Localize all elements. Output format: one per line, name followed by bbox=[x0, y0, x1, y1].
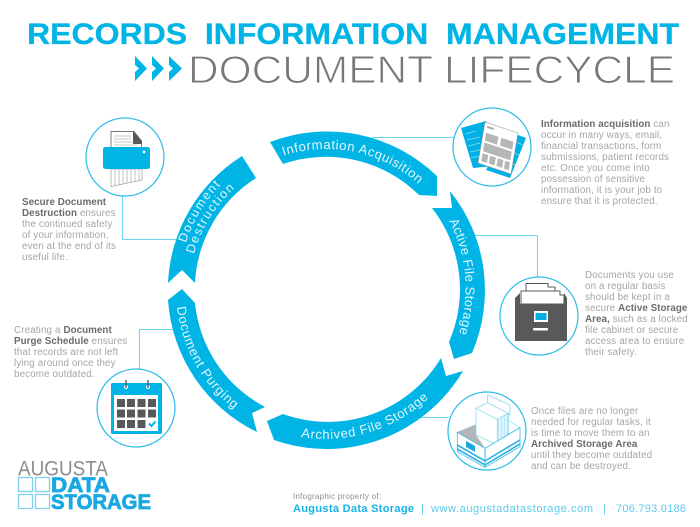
text: document purge schedule: become outdated. bbox=[14, 369, 95, 380]
text: active file storage: Area, such as a locked bbox=[585, 314, 688, 325]
segment: information acquisition bbox=[270, 132, 437, 196]
text: archived file storage bbox=[531, 406, 652, 472]
icon: file cabinet bbox=[500, 277, 578, 355]
text: archived file storage: needed for regular tasks, it bbox=[531, 417, 651, 428]
text: information acquisition: Information acquisition can bbox=[541, 119, 670, 130]
text: archived file storage: until they become outdated bbox=[531, 450, 652, 461]
icon: documents bbox=[453, 108, 531, 186]
icon: calendar bbox=[97, 369, 175, 447]
text: information acquisition: occur in many ways, email, bbox=[541, 130, 662, 141]
text: secure document destruction: Destruction ensures bbox=[22, 208, 116, 219]
text: information acquisition: information, it is your job to bbox=[541, 185, 663, 196]
text: information acquisition: submissions, patient records bbox=[541, 152, 669, 163]
text: active file storage: access area to ensure bbox=[585, 336, 685, 347]
text: information acquisition: ensure that it is protected. bbox=[541, 196, 658, 207]
subtitle: DOCUMENT LIFECYCLE bbox=[188, 49, 675, 92]
text: active file storage: on a regular basis bbox=[585, 281, 665, 292]
text: information acquisition: financial transactions, form bbox=[541, 141, 661, 152]
segment: active file storage: Active File Storage bbox=[449, 220, 475, 334]
text: document purge schedule: lying around once they bbox=[14, 358, 116, 369]
logo: Augusta Data Storage: AUGUSTA bbox=[18, 458, 108, 480]
text: secure document destruction: the continued safety bbox=[22, 219, 112, 230]
segment: archived file storage: Archived File Storage bbox=[300, 394, 428, 439]
text: active file storage: file cabinet or secure bbox=[585, 325, 679, 336]
segment: document destruction: Destruction bbox=[186, 184, 234, 253]
text: active file storage: their safety. bbox=[585, 347, 637, 358]
segment: document purging bbox=[168, 289, 265, 432]
icon: archive box bbox=[448, 392, 526, 470]
text: archived file storage: Archived Storage Area bbox=[531, 439, 638, 450]
text: secure document destruction: of your information, bbox=[22, 230, 109, 241]
footer credit: | bbox=[421, 503, 424, 515]
text: archived file storage: and can be destroyed. bbox=[531, 461, 631, 472]
footer credit: Augusta Data Storage bbox=[293, 503, 414, 515]
text: active file storage: Documents you use bbox=[585, 270, 674, 281]
footer credit bbox=[293, 492, 686, 515]
logo: Augusta Data Storage bbox=[18, 458, 151, 514]
segment: document destruction bbox=[168, 156, 256, 283]
text: document purge schedule: that records are not left bbox=[14, 347, 118, 358]
logo: Augusta Data Storage: STORAGE bbox=[51, 491, 151, 514]
text: active file storage: secure Active Storage bbox=[585, 303, 688, 314]
text: active file storage bbox=[585, 270, 688, 358]
footer credit: Infographic property of: bbox=[293, 492, 381, 501]
text: information acquisition: etc. Once you come into bbox=[541, 163, 650, 174]
icon: shredder bbox=[86, 118, 164, 196]
segment: archived file storage bbox=[267, 358, 463, 449]
text: secure document destruction bbox=[22, 197, 116, 263]
text: information acquisition: possession of sensitive bbox=[541, 174, 645, 185]
text: document purge schedule bbox=[14, 325, 127, 380]
text: information acquisition bbox=[541, 119, 670, 207]
text: active file storage: should be kept in a bbox=[585, 292, 670, 303]
footer credit: 706.793.0186 bbox=[616, 503, 686, 515]
lifecycle ring bbox=[168, 132, 485, 449]
text: secure document destruction: Secure Document bbox=[22, 197, 107, 208]
text: secure document destruction: even at the end of its bbox=[22, 241, 116, 252]
logo: Augusta Data Storage: DATA bbox=[51, 474, 110, 497]
segment: information acquisition: Information Acquisition bbox=[282, 140, 422, 184]
footer credit: | bbox=[603, 503, 606, 515]
title: RECORDS INFORMATION MANAGEMENT bbox=[27, 18, 679, 51]
segment: document destruction: Document bbox=[178, 180, 220, 242]
text: archived file storage: Once files are no longer bbox=[531, 406, 639, 417]
text: document purge schedule: Creating a Document bbox=[14, 325, 112, 336]
text: secure document destruction: useful life. bbox=[22, 252, 68, 263]
footer credit: www.augustadatastorage.com bbox=[430, 503, 593, 515]
segment: active file storage bbox=[432, 191, 485, 359]
text: archived file storage: is time to move them to an bbox=[531, 428, 650, 439]
icon: triple chevrons bbox=[135, 56, 182, 81]
connector lines bbox=[122, 138, 538, 418]
segment: document purging: Document Purging bbox=[177, 306, 238, 410]
text: document purge schedule: Purge Schedule ensures bbox=[14, 336, 127, 347]
